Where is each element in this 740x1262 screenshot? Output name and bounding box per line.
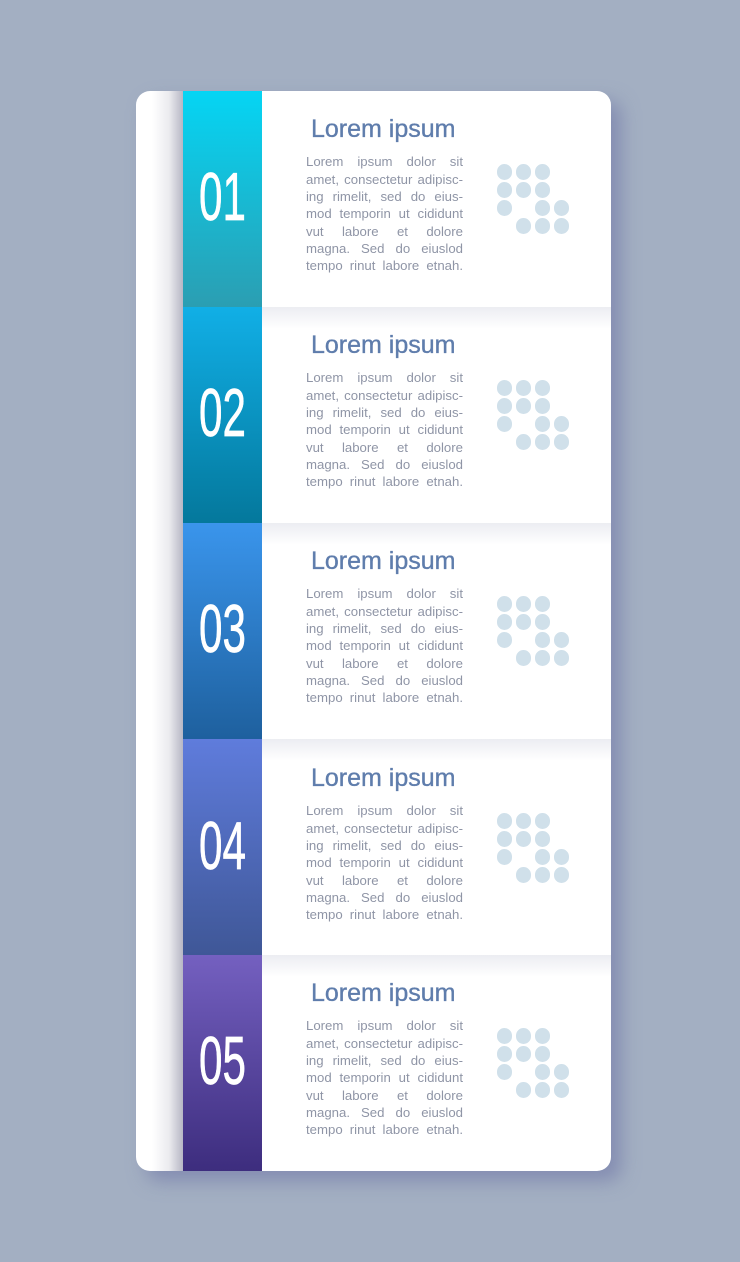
text block 2: tempo rinut labore etnah. [306,474,463,489]
text block 1: magna. Sed do eiuslod [306,241,463,256]
text block 1: Lorem ipsum dolor sit [306,154,463,169]
section 2 [183,307,611,523]
text block 4: Lorem ipsum dolor sit [306,803,463,818]
text block 3: amet, consectetur adipisc- [306,604,463,619]
text block 3: Lorem ipsum dolor sit [306,586,463,601]
text block 4: amet, consectetur adipisc- [306,821,463,836]
text block 4: tempo rinut labore etnah. [306,907,463,922]
icon: dots 3 [497,596,569,666]
heading 5: Lorem ipsum [311,979,456,1007]
section 5 [183,955,611,1171]
heading 3: Lorem ipsum [311,547,456,575]
spine shadow [152,91,183,1171]
text block 3 [306,586,463,705]
text block 2 [306,370,463,489]
text block 1: mod temporin ut cididunt [306,206,463,221]
text block 5: mod temporin ut cididunt [306,1070,463,1085]
text block 4: vut labore et dolore [306,873,463,888]
heading 1: Lorem ipsum [311,115,456,143]
section 1 [183,91,569,307]
number 02: 02 [199,375,246,451]
panel: card [136,91,610,1171]
section 3 [183,523,611,739]
icon: dots 4 [497,813,569,883]
text block 3: magna. Sed do eiuslod [306,673,463,688]
text block 2: Lorem ipsum dolor sit [306,370,463,385]
text block 1: tempo rinut labore etnah. [306,258,463,273]
text block 5: ing rimelit, sed do eius- [306,1053,463,1068]
section 4 [183,739,611,955]
text block 2: amet, consectetur adipisc- [306,388,463,403]
text block 2: ing rimelit, sed do eius- [306,405,463,420]
text block 2: mod temporin ut cididunt [306,422,463,437]
text block 3: vut labore et dolore [306,656,463,671]
icon: dots 5 [497,1028,569,1098]
text block 4: magna. Sed do eiuslod [306,890,463,905]
number column 02 [183,307,262,523]
icon: dots 1 [497,164,569,234]
heading 4: Lorem ipsum [311,764,456,792]
number column 05 [183,955,262,1171]
number 04: 04 [199,808,246,884]
text block 4: mod temporin ut cididunt [306,855,463,870]
number column 01 [183,91,262,307]
text block 1 [306,154,463,273]
icon: dots 2 [497,380,569,450]
number 03: 03 [199,591,246,667]
text block 5: tempo rinut labore etnah. [306,1122,463,1137]
text block 3: tempo rinut labore etnah. [306,690,463,705]
text block 5: amet, consectetur adipisc- [306,1036,463,1051]
text block 1: ing rimelit, sed do eius- [306,189,463,204]
text block 4: ing rimelit, sed do eius- [306,838,463,853]
number column 03 [183,523,262,739]
heading 2: Lorem ipsum [311,331,456,359]
text block 3: mod temporin ut cididunt [306,638,463,653]
text block 4 [306,803,463,922]
text block 2: magna. Sed do eiuslod [306,457,463,472]
text block 2: vut labore et dolore [306,440,463,455]
text block 5 [306,1018,463,1137]
number 05: 05 [199,1023,246,1099]
number 01: 01 [199,159,246,235]
text block 1: amet, consectetur adipisc- [306,172,463,187]
text block 1: vut labore et dolore [306,224,463,239]
text block 5: Lorem ipsum dolor sit [306,1018,463,1033]
text block 5: vut labore et dolore [306,1088,463,1103]
text block 3: ing rimelit, sed do eius- [306,621,463,636]
text block 5: magna. Sed do eiuslod [306,1105,463,1120]
number column 04 [183,739,262,955]
